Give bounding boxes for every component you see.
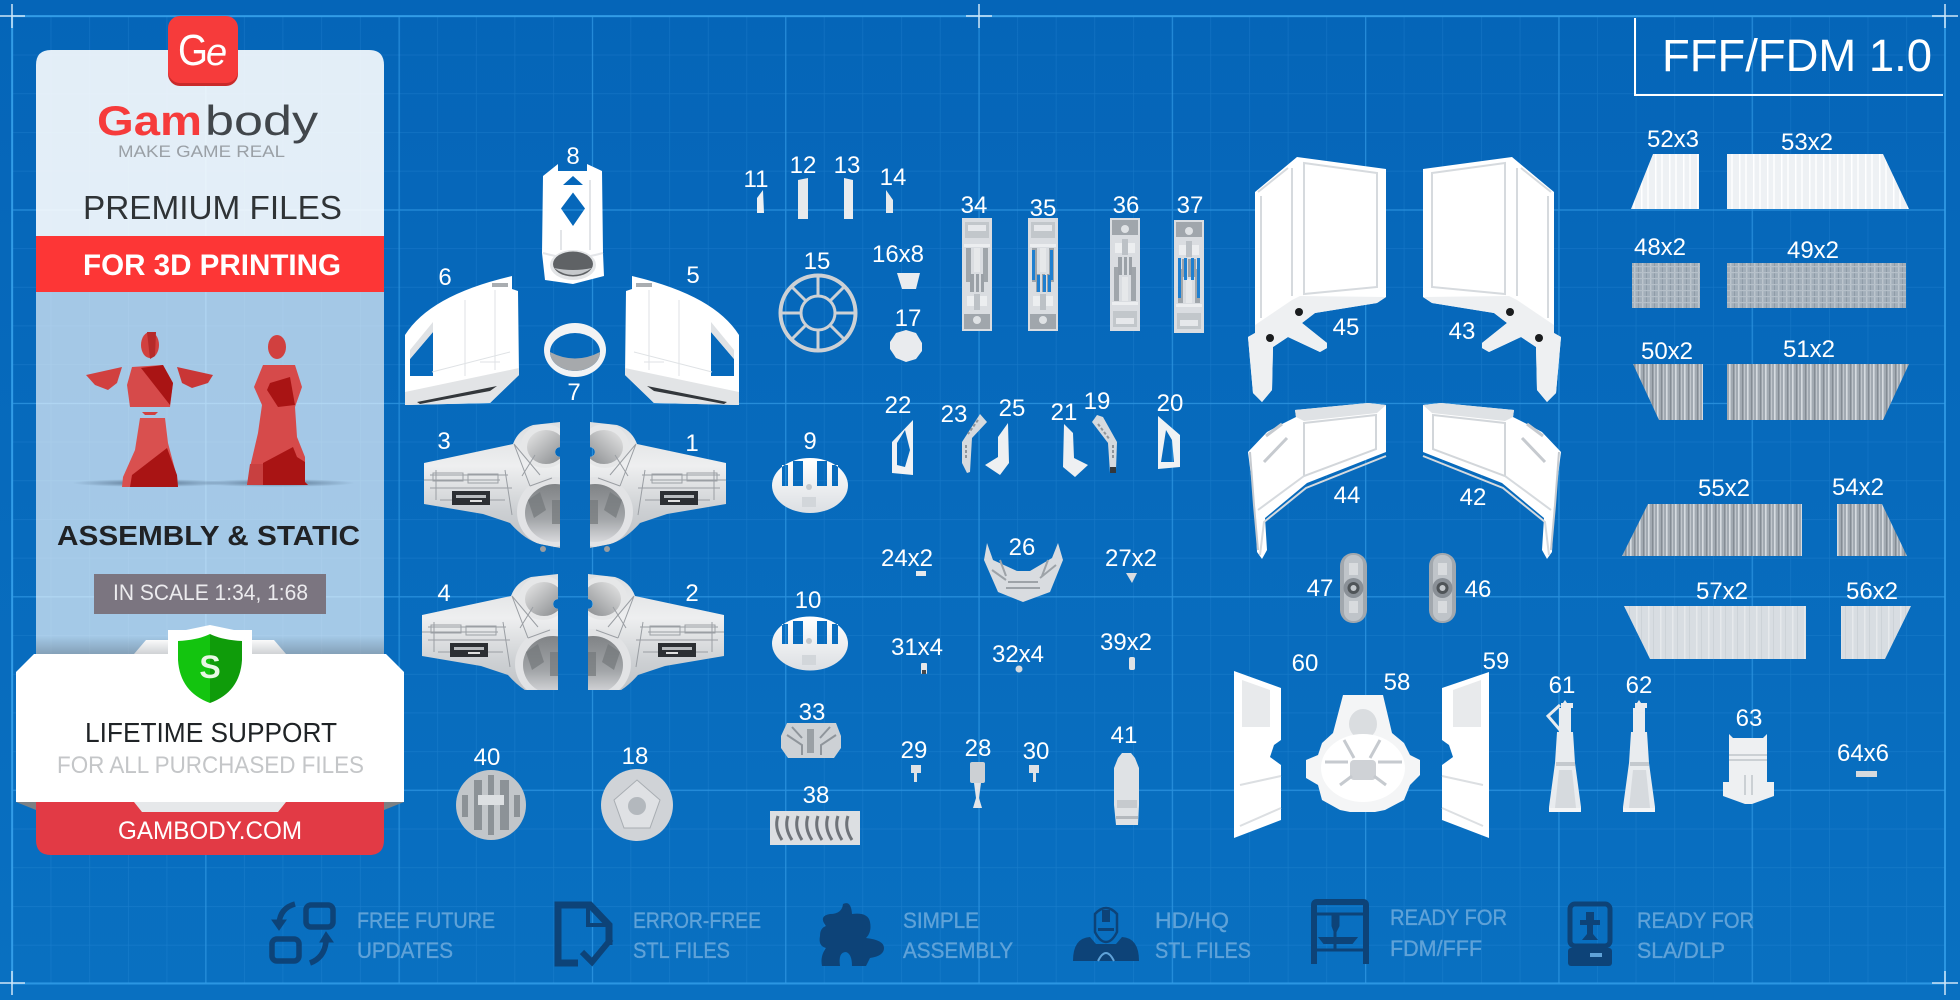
part 43: 43 [1449,318,1475,345]
icon: red figure closed [199,335,355,487]
part 61 [1548,672,1581,812]
part 23 [941,401,987,473]
brand wordmark: MAKE GAME REAL [118,142,285,161]
part 6 [405,264,519,405]
footer: gambody.com [36,802,384,855]
part 35 [1028,195,1058,331]
part 14: 14 [880,164,906,191]
part 22 [885,392,913,475]
part 37: 37 [1177,192,1203,219]
part 57x2: 57x2 [1696,578,1748,605]
part 15 [780,248,856,350]
part 14 [880,164,906,213]
part 51x2 [1727,336,1909,420]
part 28 [965,735,991,808]
part 42 [1423,403,1561,559]
part 43 [1423,157,1561,402]
part 11 [744,166,768,213]
heading: assembly and static: ASSEMBLY & STATIC [57,520,360,551]
part 45: 45 [1333,314,1359,341]
part 40: 40 [474,744,500,771]
feature: HD/HQ STL files: HD/HQ [1155,908,1229,933]
part 26: 26 [1009,534,1035,561]
part 20 [1157,390,1183,469]
part 58 [1306,669,1420,812]
part 23: 23 [941,401,967,428]
feature: HD/HQ STL files: STL FILES [1155,938,1251,963]
part 52x3: 52x3 [1647,126,1699,153]
part 1 [561,422,726,552]
part 29: 29 [901,737,927,764]
part 51x2: 51x2 [1783,336,1835,363]
feature: simple assembly: ASSEMBLY [903,938,1013,963]
panel top light area [36,50,384,236]
part 49x2: 49x2 [1787,237,1839,264]
part 62 [1623,672,1655,812]
icon: FDM printer [1314,902,1366,964]
feature: ready for SLA/DLP [1568,904,1754,966]
part 59: 59 [1483,648,1509,675]
part 50x2 [1633,338,1703,420]
part 30 [1023,738,1049,782]
part 52x3 [1631,126,1699,209]
part 38 [770,782,860,845]
part 42: 42 [1460,484,1486,511]
badge: scale: IN SCALE 1:34, 1:68 [113,580,308,605]
feature: ready for FDM/FFF: FDM/FFF [1390,936,1482,961]
part 47 [1307,553,1367,623]
part 41: 41 [1111,722,1137,749]
feature: free future updates: UPDATES [357,938,453,963]
part 19 [1084,388,1117,473]
part 30: 30 [1023,738,1049,765]
support card: FOR ALL PURCHASED FILES [57,752,364,779]
part 10 [772,587,848,670]
part 49x2 [1727,237,1906,308]
feature: error-free STL files: ERROR-FREE [633,908,761,933]
part 9 [772,428,848,513]
part 33 [781,699,841,758]
part 3 [424,422,589,552]
feature: simple assembly [820,903,1013,966]
part 63: 63 [1736,705,1762,732]
part 12 [790,152,816,219]
part 17 [890,305,922,362]
part 21 [1051,399,1088,477]
panel: Gambody promo [16,16,404,855]
part 63 [1723,705,1774,804]
icon: puzzle piece [820,903,884,966]
part 55x2 [1622,475,1802,556]
part 8: 8 [566,143,580,170]
heading: premium files: PREMIUM FILES [83,189,342,226]
part 46 [1429,553,1491,623]
part 18 [601,743,673,841]
part 13 [834,152,860,219]
part 44 [1248,403,1386,559]
part 46: 46 [1465,576,1491,603]
part 16x8 [872,241,924,289]
brand wordmark: body [205,97,318,144]
part 26 [984,534,1063,602]
part 2: 2 [685,580,699,607]
part 35: 35 [1030,195,1056,222]
part 53x2: 53x2 [1781,129,1833,156]
part 59 [1442,648,1509,838]
part 55x2: 55x2 [1698,475,1750,502]
part 29 [901,737,927,782]
part 64x6: 64x6 [1837,740,1889,767]
feature: ready for FDM/FFF: READY FOR [1390,905,1507,930]
part 27x2: 27x2 [1105,545,1157,572]
part 56x2 [1841,578,1911,659]
part 12: 12 [790,152,816,179]
part 39x2: 39x2 [1100,629,1152,656]
part 1: 1 [685,430,699,457]
icon: Ge logo: e [206,32,227,74]
feature: ready for SLA/DLP: READY FOR [1637,908,1754,933]
icon: red figure open [72,332,228,487]
footer: gambody.com: GAMBODY.COM [118,817,302,845]
part 16x8: 16x8 [872,241,924,268]
part 18: 18 [622,743,648,770]
part 31x4: 31x4 [891,634,943,661]
icon: SLA printer [1568,904,1612,966]
panel middle blue area [36,292,384,654]
feature: ready for FDM/FFF [1314,902,1507,964]
icon: update arrows [272,904,333,963]
part 37 [1174,192,1204,333]
brand wordmark: Gam [97,97,202,144]
part 61: 61 [1549,672,1575,699]
title box: FFF/FDM 1.0: FFF/FDM 1.0 [1662,30,1932,81]
part 25 [985,395,1025,475]
brand wordmark [97,97,318,161]
part 38: 38 [803,782,829,809]
part 57x2 [1624,578,1806,659]
part 60 [1234,650,1318,838]
feature: HD/HQ STL files [1073,908,1251,963]
feature: simple assembly: SIMPLE [903,908,979,933]
part 56x2: 56x2 [1846,578,1898,605]
icon: Ge logo: G [178,26,208,75]
part 24x2: 24x2 [881,545,933,572]
part 48x2: 48x2 [1634,234,1686,261]
part 36: 36 [1113,192,1139,219]
support card tab top [134,640,286,654]
badge: scale [94,574,326,614]
part 21: 21 [1051,399,1077,426]
part 62: 62 [1626,672,1652,699]
part 8 [542,143,604,284]
part 3: 3 [437,428,451,455]
part 50x2: 50x2 [1641,338,1693,365]
part 5 [625,262,739,405]
part 7: 7 [567,379,581,406]
part 53x2 [1727,129,1909,209]
part 4 [422,574,587,704]
part 47: 47 [1307,575,1333,602]
part 40 [456,744,526,840]
part 2 [559,574,724,704]
part 11: 11 [744,166,768,193]
icon: armored bust [1073,908,1139,961]
part 9: 9 [803,428,817,455]
part 6: 6 [438,264,452,291]
support card [16,654,404,812]
part 10: 10 [795,587,821,614]
part 15: 15 [804,248,830,275]
icon: Ge logo [168,16,238,86]
part 48x2 [1632,234,1700,308]
part 45 [1248,157,1386,402]
part 34 [961,192,992,331]
part 34: 34 [961,192,987,219]
feature: free future updates: FREE FUTURE [357,908,495,933]
part 19: 19 [1084,388,1110,415]
part 32x4: 32x4 [992,641,1044,668]
icon: green shield: S [199,649,221,685]
part 4: 4 [437,580,451,607]
part 17: 17 [895,305,921,332]
part 31x4 [891,634,943,674]
part 7 [544,323,606,406]
part 13: 13 [834,152,860,179]
part 41 [1111,722,1139,825]
banner: for 3D printing: FOR 3D PRINTING [83,249,341,282]
part 25: 25 [999,395,1025,422]
part 58: 58 [1384,669,1410,696]
feature: ready for SLA/DLP: SLA/DLP [1637,938,1725,963]
part 33: 33 [799,699,825,726]
feature: error-free STL files [558,905,761,963]
part 36 [1110,192,1140,331]
part 54x2: 54x2 [1832,474,1884,501]
banner: for 3D printing [36,236,384,292]
support card: LIFETIME SUPPORT [85,717,337,748]
feature: error-free STL files: STL FILES [633,938,730,963]
part 5: 5 [686,262,700,289]
part 54x2 [1832,474,1907,556]
icon: file with check [558,905,611,963]
icon: green shield [168,625,252,708]
panel shadow above support card [36,636,384,654]
part 20: 20 [1157,390,1183,417]
feature: free future updates [272,904,495,963]
title box: FFF/FDM 1.0 [1635,18,1943,95]
part 22: 22 [885,392,911,419]
part 60: 60 [1292,650,1318,677]
part 44: 44 [1334,482,1360,509]
part 39x2 [1100,629,1152,670]
part 28: 28 [965,735,991,762]
